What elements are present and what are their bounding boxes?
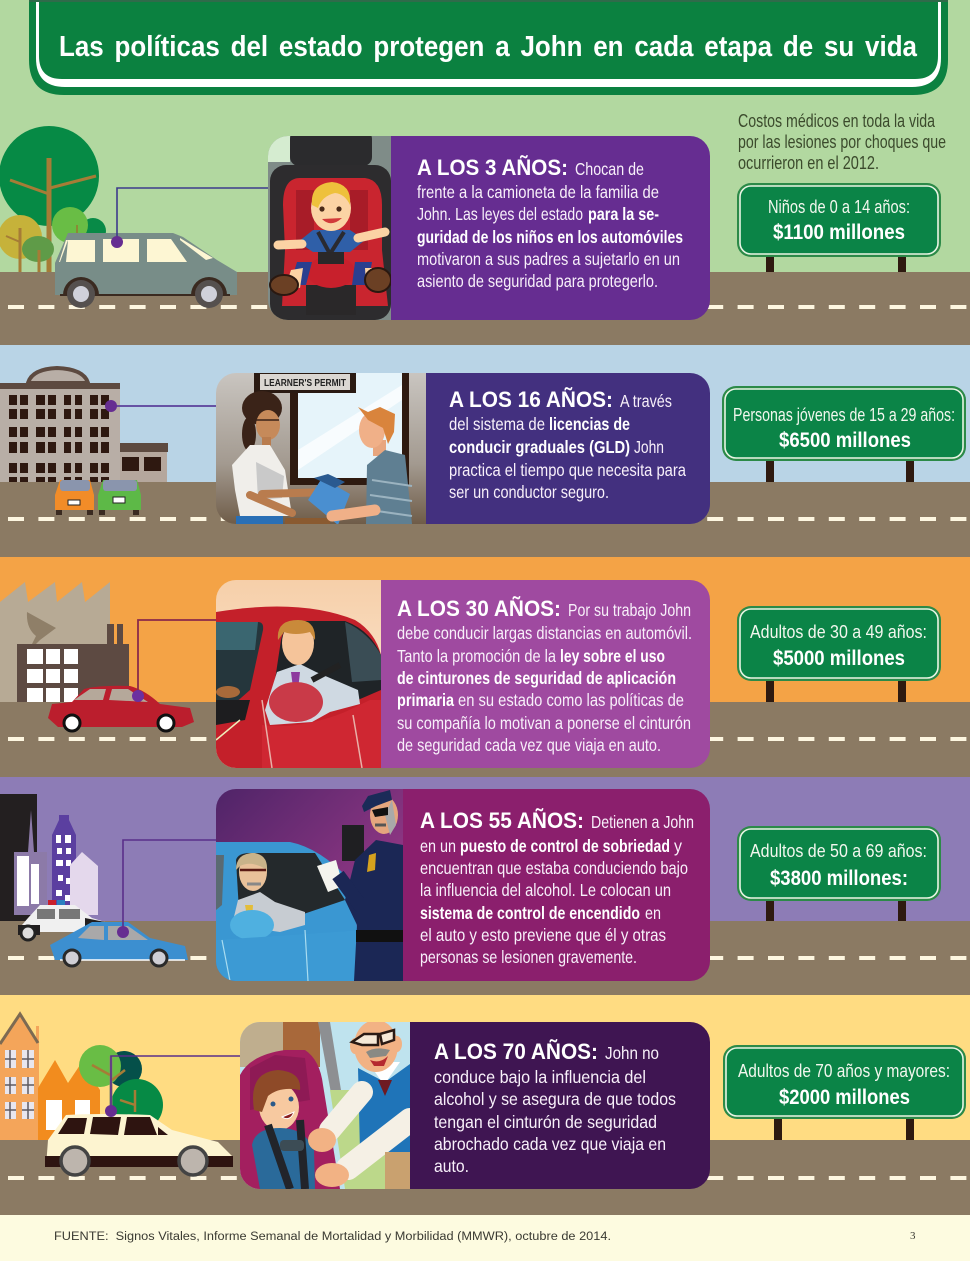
text: age 55: personas se lesionen gravemente. — [420, 947, 637, 967]
trees scene — [0, 126, 106, 272]
text: age 3: Chocan de — [575, 159, 644, 179]
sign: ages 50-69: $3800 millones: — [770, 867, 908, 890]
sign: ages 50-69 — [737, 826, 941, 921]
text: age 70: alcohol y se asegura de que todos — [434, 1089, 676, 1109]
text: age 3: frente a la camioneta de la familia de — [417, 182, 659, 202]
text: age 70: A LOS 70 AÑOS: — [434, 1039, 598, 1064]
panel: age 70 — [240, 1020, 710, 1189]
houses scene — [0, 1014, 100, 1140]
text: age 3 — [417, 155, 683, 291]
photo: driver in red car — [216, 580, 710, 768]
text: age 3: asiento de seguridad para protegerlo. — [417, 271, 658, 291]
station wagon — [45, 1114, 233, 1175]
source note: FUENTE: Signos Vitales, Informe Semanal de Mortalidad y Morbilidad (MMWR), octubre de 2014. — [54, 1231, 611, 1243]
text: age 16: A través — [620, 391, 672, 411]
caption: lifetime medical costs — [738, 111, 946, 173]
text: age 55: sistema de control de encendido — [420, 903, 640, 923]
text: age 3: John. Las leyes del estado — [417, 204, 583, 224]
sign: ages 30-49 — [737, 606, 941, 702]
connector 2 — [105, 400, 216, 412]
photo: police checkpoint — [216, 789, 710, 981]
sign: ages 0-14: $1100 millones — [773, 221, 905, 244]
text: age 30: ley sobre el uso — [560, 646, 665, 666]
text: age 55: A LOS 55 AÑOS: — [420, 808, 584, 833]
text: age 3: guridad de los niños en los automóviles — [417, 227, 683, 247]
photo: learner's permit — [216, 373, 710, 525]
page number: 3 — [910, 1230, 916, 1242]
text: age 30: en su estado como las políticas de — [458, 690, 684, 710]
text: age 70 — [434, 1039, 676, 1176]
text: age 70: abrochado cada vez que viaja en — [434, 1134, 666, 1154]
caption: lifetime medical costs: ocurrieron en el 2012. — [738, 153, 879, 173]
text: age 16: licencias de — [549, 414, 630, 434]
text: age 70: conduce bajo la influencia del — [434, 1067, 646, 1087]
blue car — [50, 922, 188, 966]
photo: baby in car seat — [268, 130, 710, 320]
text: age 3: motivaron a sus padres a sujetarlo en un — [417, 249, 680, 269]
text: age 70: tengan el cinturón de seguridad — [434, 1112, 657, 1132]
text: age 55: encuentran que estaba conduciendo bajo — [420, 858, 688, 878]
text: age 30: de cinturones de seguridad de aplicación — [397, 668, 676, 688]
text: age 30: de seguridad cada vez que viaja en auto. — [397, 735, 661, 755]
red car — [48, 686, 194, 731]
text: age 30: A LOS 30 AÑOS: — [397, 596, 561, 621]
title banner — [29, 0, 948, 95]
connector 3 — [132, 620, 216, 702]
text: age 30: debe conducir largas distancias en automóvil. — [397, 623, 692, 643]
text: age 55: en — [645, 903, 661, 923]
text: age 30: Tanto la promoción de la — [397, 646, 556, 666]
band 3: orange sky and road — [0, 557, 970, 777]
connector 4 — [117, 840, 216, 938]
sign: ages 50-69: Adultos de 50 a 69 años: — [750, 841, 927, 861]
sign: ages 30-49: Adultos de 30 a 49 años: — [750, 622, 927, 642]
text: age 30: primaria — [397, 690, 454, 710]
text: age 55: y — [674, 836, 682, 856]
text: age 30 — [397, 596, 692, 755]
orange and green cars — [55, 480, 141, 515]
sign: ages 70+ — [723, 1045, 966, 1140]
sign: ages 0-14: Niños de 0 a 14 años: — [768, 197, 910, 217]
city scene — [0, 794, 98, 921]
trees by the road — [79, 1045, 163, 1131]
police car — [18, 900, 120, 940]
text: age 16: practica el tiempo que necesita para — [449, 460, 686, 480]
band 1: green sky and road — [0, 0, 970, 345]
text: age 55: el auto y esto previene que él y otras — [420, 925, 666, 945]
text: age 3: A LOS 3 AÑOS: — [417, 155, 568, 180]
panel: age 16 — [216, 373, 710, 525]
text: age 55: en un — [420, 836, 456, 856]
text: age 16: ser un conductor seguro. — [449, 482, 609, 502]
text: age 55: Detienen a John — [591, 812, 694, 832]
text: age 16 — [449, 387, 686, 502]
text: age 3: para la se- — [588, 204, 659, 224]
text: age 30: su compañía lo motivan a ponerse el cinturón — [397, 713, 691, 733]
sign: ages 15-29 — [722, 386, 966, 482]
sign: ages 30-49: $5000 millones — [773, 647, 905, 670]
band 5: yellow sky and road — [0, 995, 970, 1215]
text: age 30: Por su trabajo John — [568, 600, 691, 620]
connector 1 — [111, 188, 268, 248]
sign: ages 15-29: $6500 millones — [779, 429, 911, 452]
text: age 55: la influencia del alcohol. Le colocan un — [420, 880, 671, 900]
sign: ages 0-14 — [737, 183, 941, 272]
footer — [0, 1215, 970, 1261]
text: age 70: auto. — [434, 1156, 469, 1176]
panel: age 30 — [216, 580, 710, 768]
text: age 16: John — [634, 437, 664, 457]
connector 5 — [105, 1056, 240, 1117]
band 4: purple sky and road — [0, 777, 970, 995]
text: age 16: del sistema de — [449, 414, 545, 434]
sign: ages 70+: $2000 millones — [779, 1086, 910, 1109]
panel: age 3 — [268, 130, 710, 320]
photo: learner's permit: LEARNER'S PERMIT — [264, 377, 346, 389]
photo: grandfather and boy — [240, 1020, 710, 1189]
van — [55, 233, 237, 308]
text: age 70: John no — [605, 1043, 659, 1063]
text: age 55 — [420, 808, 694, 967]
text: age 55: puesto de control de sobriedad — [460, 836, 670, 856]
text: age 16: A LOS 16 AÑOS: — [449, 387, 613, 412]
building scene — [0, 368, 168, 482]
factory scene — [0, 582, 129, 702]
text: age 16: conducir graduales (GLD) — [449, 437, 630, 457]
panel: age 55 — [216, 789, 710, 981]
band 2: blue sky and road — [0, 345, 970, 557]
